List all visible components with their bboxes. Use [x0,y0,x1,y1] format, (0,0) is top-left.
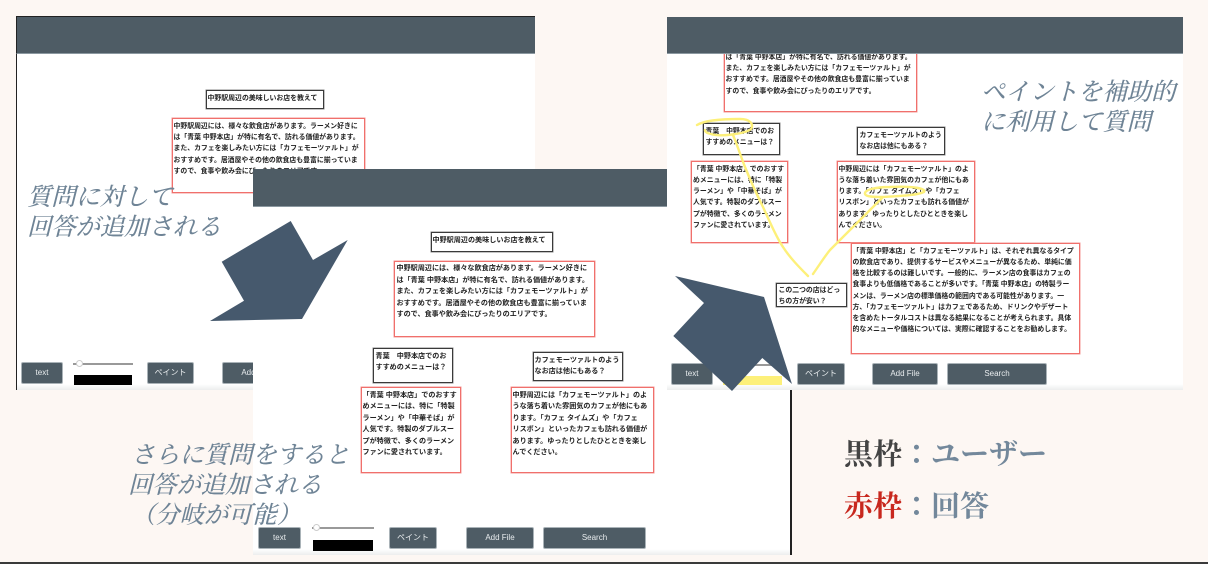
user question box [431,232,553,252]
merged answer box [851,243,1080,354]
caption: branching [128,435,350,530]
branch answer 1: プが特徴で、多くのラーメン [693,211,782,218]
button: search: Search [984,369,1010,378]
button: add file [222,362,290,384]
merged answer box: 的なメニューや価格については、実際に確認することをお勧めします。 [852,326,1071,333]
merged answer box: 食事よりも低価格であることが多いです。「青葉 中野本店」の特製ラー [852,281,1069,288]
branch answer 2: うな落ち着いた雰囲気のカフェが他にもあ [838,177,969,184]
branch answer 1: 「青葉 中野本店」でのおすす [693,166,784,172]
branch question 1: すすめのメニューは？ [376,363,446,371]
caption: answer is added: 質問に対して [27,177,173,212]
button: add file [466,527,534,549]
answer box: すので、食事や飲み会にぴったりのエリアです。 [174,168,323,175]
header bar [253,169,792,207]
button: text [258,527,301,549]
caption: paint assisted question [981,72,1178,137]
branch question 2: なお店は他にもある？ [860,143,928,150]
button: add file: Add File [485,533,515,542]
button: paint: ペイント [397,533,429,542]
branch question 2: カフェモーツァルトのよう [860,132,942,138]
answer box [172,118,365,193]
button: search [947,363,1047,385]
merged answer box: 方、「カフェモーツァルト」はカフェであるため、ドリンクやデザート [852,304,1068,311]
branch answer 2: リスボン」といったカフェも訪れる価値が [838,199,969,206]
scrolled answer box [724,32,917,112]
button: text: text [273,533,286,542]
branch answer 1: プが特徴で、多くのラーメン [362,437,454,445]
colour swatch: black [74,375,132,385]
branch answer 1: ラーメン」や「中華そば」が [693,188,782,195]
branch answer 2: んでください。 [512,448,562,456]
branch answer 2 [837,161,975,243]
button: search: Search [582,533,607,542]
merged question box: ちの方が安い？ [778,298,827,305]
answer box: は「青葉 中野本店」が特に有名で、訪れる価値があります。 [396,276,589,284]
branch question 2 [857,127,945,155]
scrolled answer box: すので、食事や飲み会にぴったりのエリアです。 [726,88,875,95]
branch answer 1 [691,161,788,243]
branch answer 1: 人気です。特製のダブルスー [693,199,781,206]
button: add file [872,363,938,385]
scrolled answer box: は「青葉 中野本店」が特に有名で、訪れる価値があります。 [726,54,912,61]
answer box: は「青葉 中野本店」が特に有名で、訪れる価値があります。 [174,134,360,141]
caption: paint assisted question: に利用して質問 [981,102,1151,137]
branch answer 2: んでください。 [838,222,886,229]
button: add file: Add File [890,369,920,378]
button: paint: ペイント [154,368,186,377]
branch answer 2: うな落ち着いた雰囲気のカフェが他にもあ [512,402,647,410]
button: text [21,362,63,384]
answer box [394,261,595,337]
caption: branching: さらに質問をすると [131,435,350,470]
branch answer 1: めメニューには、特に「特製 [362,402,455,410]
answer box: おすすめです。居酒屋やその他の飲食店も豊富に揃っていま [396,299,587,307]
branch answer 2: 中野周辺には「カフェモーツァルト」のよ [838,166,969,172]
button: text: text [36,368,48,377]
branch answer 2: ります。「カフェ タイムズ」や「カフェ [838,188,960,195]
branch answer 2: リスボン」といったカフェも訪れる価値が [512,425,647,433]
branch answer 1: めメニューには、特に「特製 [693,177,782,184]
slider [73,363,133,364]
branch question 1 [373,348,453,383]
merged answer box: を含めたトータルコストは異なる結果になることが考えられます。具体 [852,315,1071,322]
branch question 1: 青葉 中野本店でのお [376,352,446,360]
branch answer 2: 中野周辺には「カフェモーツァルト」のよ [512,390,647,398]
caption: branching: 回答が追加される [128,465,322,500]
arrow: step 2 to step 3 [673,276,792,391]
merged question box [776,283,847,307]
button: paint [797,363,845,385]
button: paint [147,362,194,384]
branch answer 2: あります。ゆったりとしたひとときを楽し [838,211,968,218]
branch answer 1: ファンに愛されています。 [362,448,447,456]
colour swatch: yellow [723,376,782,385]
colour swatch: black [313,540,373,551]
scrolled answer box: おすすめです。居酒屋やその他の飲食店も豊富に揃っていま [726,76,910,83]
panel: step 1 screen [16,16,535,390]
branch answer 2 [511,387,654,473]
merged answer box: の飲食店であり、提供するサービスやメニューが異なるため、単純に価 [852,259,1072,266]
caption: branching: （分岐が可能） [131,495,301,530]
user question box [206,90,324,109]
branch answer 2: あります。ゆったりとしたひとときを楽し [512,437,646,445]
yellow hand-drawn paint strokes [696,118,926,278]
button: paint [389,527,437,549]
answer box: おすすめです。居酒屋やその他の飲食店も豊富に揃っていま [174,157,358,164]
panel: step 2 screen [253,169,792,555]
branch answer 1: 人気です。特製のダブルスー [362,425,454,433]
user question box: 中野駅周辺の美味しいお店を教えて [432,236,546,244]
branch question 2: なお店は他にもある？ [534,367,605,375]
slider [723,364,782,366]
branch answer 1: 「青葉 中野本店」でのおすす [362,390,457,398]
legend: black frame: 黒枠：ユーザー [844,432,1047,473]
answer box: また、カフェを楽しみたい方には「カフェモーツァルト」が [396,287,588,295]
slider thumb [313,524,320,531]
merged answer box: メンは、ラーメン店の標準価格の範囲内である可能性があります。一 [852,292,1064,300]
button: text: text [686,369,698,378]
header bar [667,17,1183,54]
branch question 1 [703,123,780,155]
button: text [671,363,713,385]
scrolled answer box: また、カフェを楽しみたい方には「カフェモーツァルト」が [726,65,911,72]
answer box: すので、食事や飲み会にぴったりのエリアです。 [396,310,552,318]
branch question 1: 青葉 中野本店でのお [706,128,774,134]
slider [312,527,374,528]
answer box: 中野駅周辺には、様々な飲食店があります。ラーメン好きに [174,123,358,130]
branch question 2: カフェモーツァルトのよう [534,356,619,364]
branch answer 1: ファンに愛されています。 [693,222,774,229]
legend: red frame: 赤枠：回答 [844,484,989,525]
branch answer 1 [361,387,461,473]
panel: step 3 screen [667,17,1183,390]
header bar [16,16,535,54]
merged answer box: 「青葉 中野本店」と「カフェモーツァルト」は、それぞれ異なるタイプ [852,248,1074,254]
branch question 1: すすめのメニューは？ [706,139,774,146]
bottom rule [0,562,1208,564]
answer box: また、カフェを楽しみたい方には「カフェモーツァルト」が [174,145,359,152]
caption: answer is added: 回答が追加される [27,207,221,242]
button: paint: ペイント [805,369,837,378]
button: add file: Add File [241,368,271,377]
merged question box: この二つの店はどっ [778,286,840,294]
merged answer box: 格を比較するのは難しいです。一般的に、ラーメン店の食事はカフェの [852,270,1071,277]
caption: paint assisted question: ペイントを補助的 [981,72,1175,107]
branch answer 2: ります。「カフェ タイムズ」や「カフェ [512,414,638,422]
branch answer 1: ラーメン」や「中華そば」が [362,414,454,422]
scrolled answer box: 中野駅周辺には、様々な飲食店があります。ラーメン好きに [726,43,910,50]
branch question 2 [533,352,623,381]
button: search [543,527,646,549]
arrow: step 1 to step 2 [210,221,348,321]
user question box: 中野駅周辺の美味しいお店を教えて [208,94,317,102]
caption: answer is added [27,177,221,242]
answer box: 中野駅周辺には、様々な飲食店があります。ラーメン好きに [396,264,587,272]
slider thumb [76,360,83,367]
